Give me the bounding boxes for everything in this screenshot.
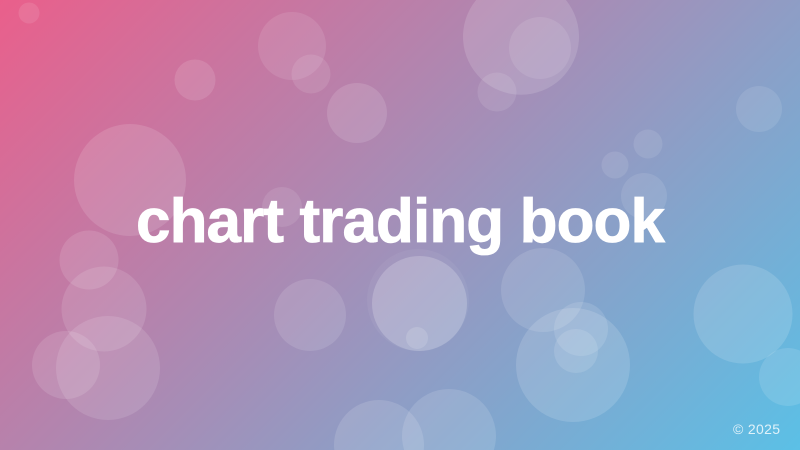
title: chart trading book	[136, 187, 666, 256]
copyright: © 2025	[733, 421, 780, 437]
